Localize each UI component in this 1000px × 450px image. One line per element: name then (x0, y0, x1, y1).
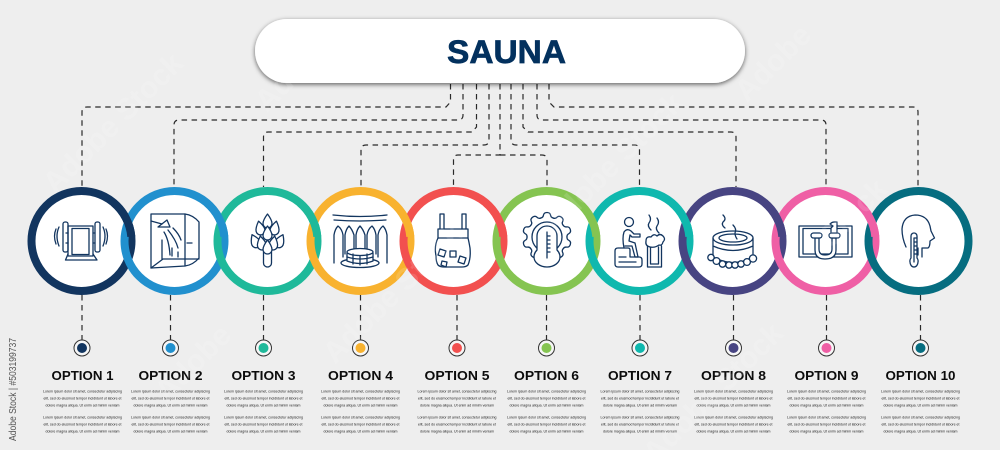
stem and marker (162, 295, 178, 356)
text: option 6: Lorem ipsum dolor sit amet, consectetur adipiscing (507, 414, 586, 419)
text: option 6: OPTION 6 (514, 368, 579, 383)
icon: sauna whisk (248, 214, 287, 267)
text: option 6: dolore magna aliqua. Ut enim ad minim veniam (510, 402, 584, 407)
text: option 6: elit, sed do eiusmod tempor incididunt ut labore et (508, 421, 586, 426)
stock watermark: Adobe Stock (317, 217, 470, 370)
text: option 4: OPTION 4 (328, 368, 394, 383)
connector lines from title to circles (82, 84, 918, 187)
text: option 2: dolore magna aliqua. Ut enim ad minim veniam (134, 428, 208, 433)
panel: option 2 (124, 191, 224, 433)
stock watermark: Stock (813, 173, 894, 254)
text: option 6: elit, sed do eiusmod tempor incididunt ut labore et (508, 395, 586, 400)
text: option 10: dolore magna aliqua. Ut enim ad minim veniam (884, 402, 958, 407)
stem and marker (352, 295, 368, 356)
icon: pipe and radiator panel (799, 222, 852, 259)
text: option 8: elit, sed do eiusmod tempor incididunt ut labore et (694, 395, 773, 400)
text: option 1: Lorem ipsum dolor sit amet, consectetur adipiscing (43, 388, 122, 393)
text: option 9: elit, sed do eiusmod tempor incididunt ut labore et (788, 395, 866, 400)
icon: sauna room with tub (333, 215, 387, 268)
stem and marker (449, 295, 465, 356)
text: option 1: OPTION 1 (52, 368, 114, 383)
text: option 8: elit, sed do eiusmod tempor incididunt ut labore et (694, 421, 773, 426)
text: option 5: elit, sed do eiusmod tempor incididunt ut labore et (418, 395, 497, 400)
panel: option 3 (218, 191, 318, 433)
text: option 9: Lorem ipsum dolor sit amet, consectetur adipiscing (787, 414, 866, 419)
panel: option 1 (32, 191, 132, 433)
text: option 7: dolore magna aliqua. Ut enim ad minim veniam (603, 428, 678, 433)
icon: head with thermometer (902, 215, 934, 267)
text: option 8 (694, 368, 773, 433)
text: option 7: Lorem ipsum dolor sit amet, consectetur adipiscing (600, 414, 680, 419)
interlocking ring overlaps (114, 203, 875, 237)
stem and marker (74, 295, 90, 356)
text: option 9: dolore magna aliqua. Ut enim ad minim veniam (790, 402, 864, 407)
text: option 2: elit, sed do eiusmod tempor incididunt ut labore et (132, 395, 210, 400)
text: option 7: Lorem ipsum dolor sit amet, consectetur adipiscing (600, 388, 680, 393)
text: option 2: Lorem ipsum dolor sit amet, consectetur adipiscing (131, 414, 210, 419)
text: option 3: Lorem ipsum dolor sit amet, consectetur adipiscing (224, 388, 303, 393)
text: option 3: elit, sed do eiusmod tempor incididunt ut labore et (224, 395, 303, 400)
text: option 8: Lorem ipsum dolor sit amet, consectetur adipiscing (694, 414, 773, 419)
stock watermark: Adobe (729, 19, 818, 108)
text: option 9: OPTION 9 (794, 368, 858, 383)
text: option 9: elit, sed do eiusmod tempor incididunt ut labore et (788, 421, 866, 426)
text: option 3: elit, sed do eiusmod tempor incididunt ut labore et (224, 421, 303, 426)
stock watermark: Adobe Stock (37, 47, 190, 200)
icon: bag of ice cubes (435, 214, 470, 267)
stem and marker (632, 295, 648, 356)
text: option 7: OPTION 7 (608, 368, 672, 383)
text: option 4: elit, sed do eiusmod tempor incididunt ut labore et (322, 395, 400, 400)
text: option 10: elit, sed do eiusmod tempor incididunt ut labore et (882, 395, 960, 400)
text: option 8: dolore magna aliqua. Ut enim ad minim veniam (696, 428, 771, 433)
text: option 4: Lorem ipsum dolor sit amet, consectetur adipiscing (321, 414, 400, 419)
title pill: SAUNA (447, 34, 566, 70)
text: option 5: dolore magna aliqua. Ut enim ad minim veniam (420, 428, 495, 433)
stem and marker (912, 295, 928, 356)
icon: hot tub with stones (708, 215, 757, 268)
title pill (255, 19, 745, 83)
text: option 1: elit, sed do eiusmod tempor incididunt ut labore et (44, 421, 122, 426)
text: option 1: dolore magna aliqua. Ut enim ad minim veniam (46, 402, 120, 407)
text: option 4 (321, 368, 400, 433)
text: option 6 (507, 368, 586, 433)
text: option 10: Lorem ipsum dolor sit amet, consectetur adipiscing (881, 414, 960, 419)
text: option 10: Lorem ipsum dolor sit amet, consectetur adipiscing (881, 388, 960, 393)
vertical stock id: Adobe Stock | #503199737 (7, 338, 19, 441)
text: option 10: dolore magna aliqua. Ut enim ad minim veniam (884, 428, 958, 433)
text: option 1: dolore magna aliqua. Ut enim ad minim veniam (46, 428, 120, 433)
icon: seated person and steaming mug (615, 215, 664, 267)
text: option 1: elit, sed do eiusmod tempor incididunt ut labore et (44, 395, 122, 400)
text: option 2: Lorem ipsum dolor sit amet, consectetur adipiscing (131, 388, 210, 393)
icon: vibrating machine (54, 222, 108, 260)
text: option 7 (600, 368, 680, 433)
text: option 9: Lorem ipsum dolor sit amet, consectetur adipiscing (787, 388, 866, 393)
text: option 2: OPTION 2 (138, 368, 202, 383)
text: option 8: OPTION 8 (701, 368, 766, 383)
stem and marker (256, 295, 272, 356)
text: option 6: dolore magna aliqua. Ut enim ad minim veniam (510, 428, 584, 433)
text: option 1: Lorem ipsum dolor sit amet, consectetur adipiscing (43, 414, 122, 419)
text: option 5: elit, sed do eiusmod tempor incididunt ut labore et (418, 421, 497, 426)
text: option 3: Lorem ipsum dolor sit amet, consectetur adipiscing (224, 414, 303, 419)
panel: option 9 (776, 191, 876, 433)
text: option 4: elit, sed do eiusmod tempor incididunt ut labore et (322, 421, 400, 426)
text: option 4: dolore magna aliqua. Ut enim ad minim veniam (324, 428, 398, 433)
stock watermark: Adobe Stock (537, 87, 690, 240)
text: option 5 (418, 368, 497, 433)
text: option 10: elit, sed do eiusmod tempor incididunt ut labore et (882, 421, 960, 426)
text: option 2: elit, sed do eiusmod tempor incididunt ut labore et (132, 421, 210, 426)
panel: option 5 (404, 191, 504, 433)
stem and marker (818, 295, 834, 356)
text: option 3: OPTION 3 (232, 368, 296, 383)
text: option 2 (131, 368, 210, 433)
panel: option 7 (590, 191, 690, 433)
text: option 7: elit, sed do eiusmod tempor incididunt ut labore et (601, 421, 680, 426)
text: option 6: Lorem ipsum dolor sit amet, consectetur adipiscing (507, 388, 586, 393)
text: option 9 (787, 368, 866, 433)
text: option 3: dolore magna aliqua. Ut enim ad minim veniam (226, 428, 301, 433)
panel: option 6 (496, 191, 596, 433)
text: option 7: dolore magna aliqua. Ut enim ad minim veniam (603, 402, 678, 407)
panel: option 4 (310, 191, 410, 433)
panel: option 10 (868, 191, 968, 433)
text: option 9: dolore magna aliqua. Ut enim ad minim veniam (790, 428, 864, 433)
text: option 5: OPTION 5 (424, 368, 490, 383)
text: option 10: OPTION 10 (886, 368, 956, 383)
panel: option 8 (682, 191, 782, 433)
stock watermark: Adobe (149, 319, 238, 408)
text: option 4: Lorem ipsum dolor sit amet, consectetur adipiscing (321, 388, 400, 393)
text: option 1 (43, 368, 122, 433)
icon: shower cabin (151, 214, 199, 268)
text: option 4: dolore magna aliqua. Ut enim ad minim veniam (324, 402, 398, 407)
stem and marker (538, 295, 554, 356)
icon: gear with thermometer (522, 212, 572, 267)
text: option 5: Lorem ipsum dolor sit amet, consectetur adipiscing (418, 414, 496, 419)
text: option 3: dolore magna aliqua. Ut enim ad minim veniam (226, 402, 301, 407)
text: option 8: Lorem ipsum dolor sit amet, consectetur adipiscing (694, 388, 773, 393)
text: option 7: elit, sed do eiusmod tempor incididunt ut labore et (601, 395, 680, 400)
text: option 8: dolore magna aliqua. Ut enim ad minim veniam (696, 402, 771, 407)
white circle fills (32, 191, 968, 291)
text: option 2: dolore magna aliqua. Ut enim ad minim veniam (134, 402, 208, 407)
stock watermark: Adobe (249, 29, 338, 118)
text: option 5: Lorem ipsum dolor sit amet, consectetur adipiscing (418, 388, 496, 393)
text: option 5: dolore magna aliqua. Ut enim ad minim veniam (420, 402, 495, 407)
text: option 3 (224, 368, 303, 433)
text: option 10 (881, 368, 960, 433)
stem and marker (726, 295, 742, 356)
